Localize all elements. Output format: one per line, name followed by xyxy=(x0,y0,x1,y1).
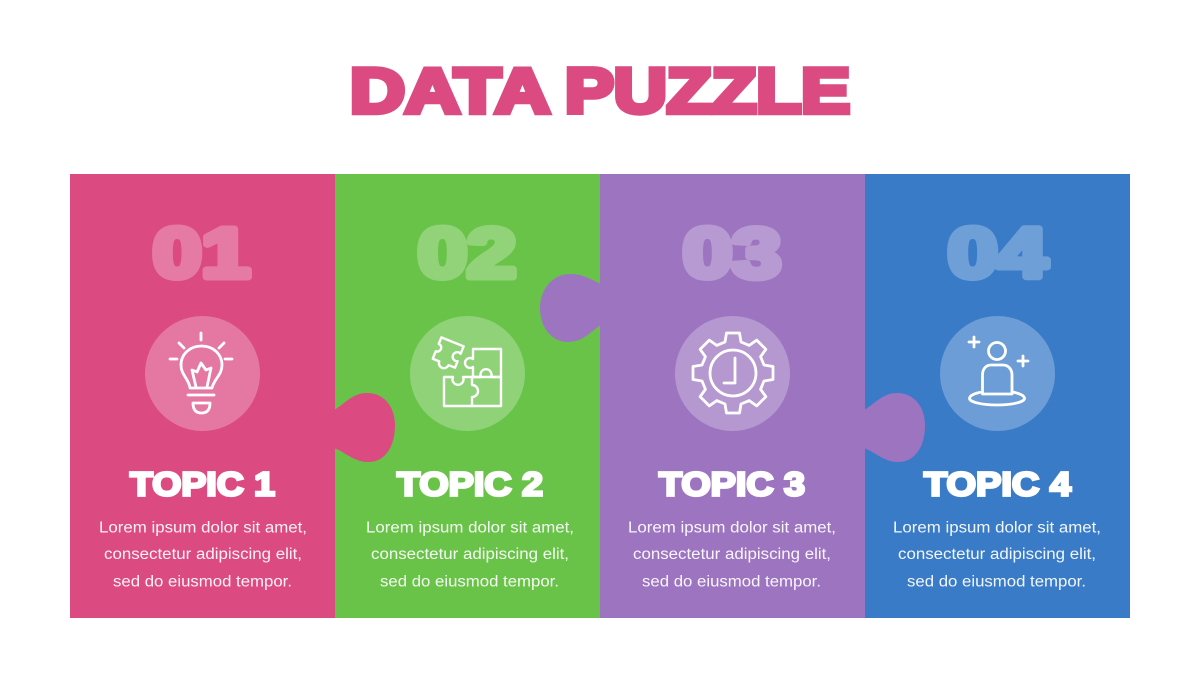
text block: topic 3 xyxy=(628,520,836,590)
title: PUZZLE xyxy=(565,56,850,126)
icon: gear clock xyxy=(693,333,773,413)
puzzle tab: purple into blue xyxy=(864,393,925,462)
text block: topic 2: sed do eiusmod tempor. xyxy=(380,574,559,590)
text block: topic 3: consectetur adipiscing elit, xyxy=(633,546,831,563)
text block: topic 2: consectetur adipiscing elit, xyxy=(371,546,569,563)
heading: topic 3: TOPIC 3 xyxy=(659,466,805,502)
icon: puzzle pieces xyxy=(431,337,501,406)
text block: topic 3: sed do eiusmod tempor. xyxy=(642,574,821,590)
text block: topic 1 xyxy=(99,520,307,590)
icon: light bulb xyxy=(170,333,232,413)
icon circle: person on platform xyxy=(940,316,1055,431)
panel: topic 3 xyxy=(600,174,865,618)
title: DATA xyxy=(350,56,550,126)
panel: topic 4 xyxy=(865,174,1130,618)
icon: person on platform xyxy=(969,337,1028,405)
heading: topic 1: TOPIC 1 xyxy=(130,466,275,502)
icon circle: gear clock xyxy=(675,316,790,431)
panel: topic 1 xyxy=(70,174,335,618)
icon circle: light bulb xyxy=(145,316,260,431)
heading: topic 2: TOPIC 2 xyxy=(397,466,543,502)
text block: topic 1: sed do eiusmod tempor. xyxy=(113,574,292,590)
heading: topic 4: TOPIC 4 xyxy=(924,466,1072,502)
text block: topic 2: Lorem ipsum dolor sit amet, xyxy=(366,520,574,536)
text block: topic 2 xyxy=(366,520,574,590)
text block: topic 4: sed do eiusmod tempor. xyxy=(907,574,1086,590)
number 01: 01 xyxy=(153,214,250,292)
text block: topic 4: consectetur adipiscing elit, xyxy=(898,546,1096,563)
number 03: 03 xyxy=(683,214,781,292)
number 04: 04 xyxy=(948,214,1047,292)
puzzle tab: pink into green xyxy=(334,393,395,462)
text block: topic 3: Lorem ipsum dolor sit amet, xyxy=(628,520,836,536)
text block: topic 1: Lorem ipsum dolor sit amet, xyxy=(99,520,307,536)
puzzle tab: purple into green xyxy=(540,274,601,342)
text block: topic 4: Lorem ipsum dolor sit amet, xyxy=(893,520,1101,536)
title xyxy=(350,56,850,126)
panel: topic 2 xyxy=(335,174,600,618)
text block: topic 1: consectetur adipiscing elit, xyxy=(104,546,302,563)
number 02: 02 xyxy=(418,214,516,292)
icon circle: puzzle xyxy=(410,316,525,431)
text block: topic 4 xyxy=(893,520,1101,590)
